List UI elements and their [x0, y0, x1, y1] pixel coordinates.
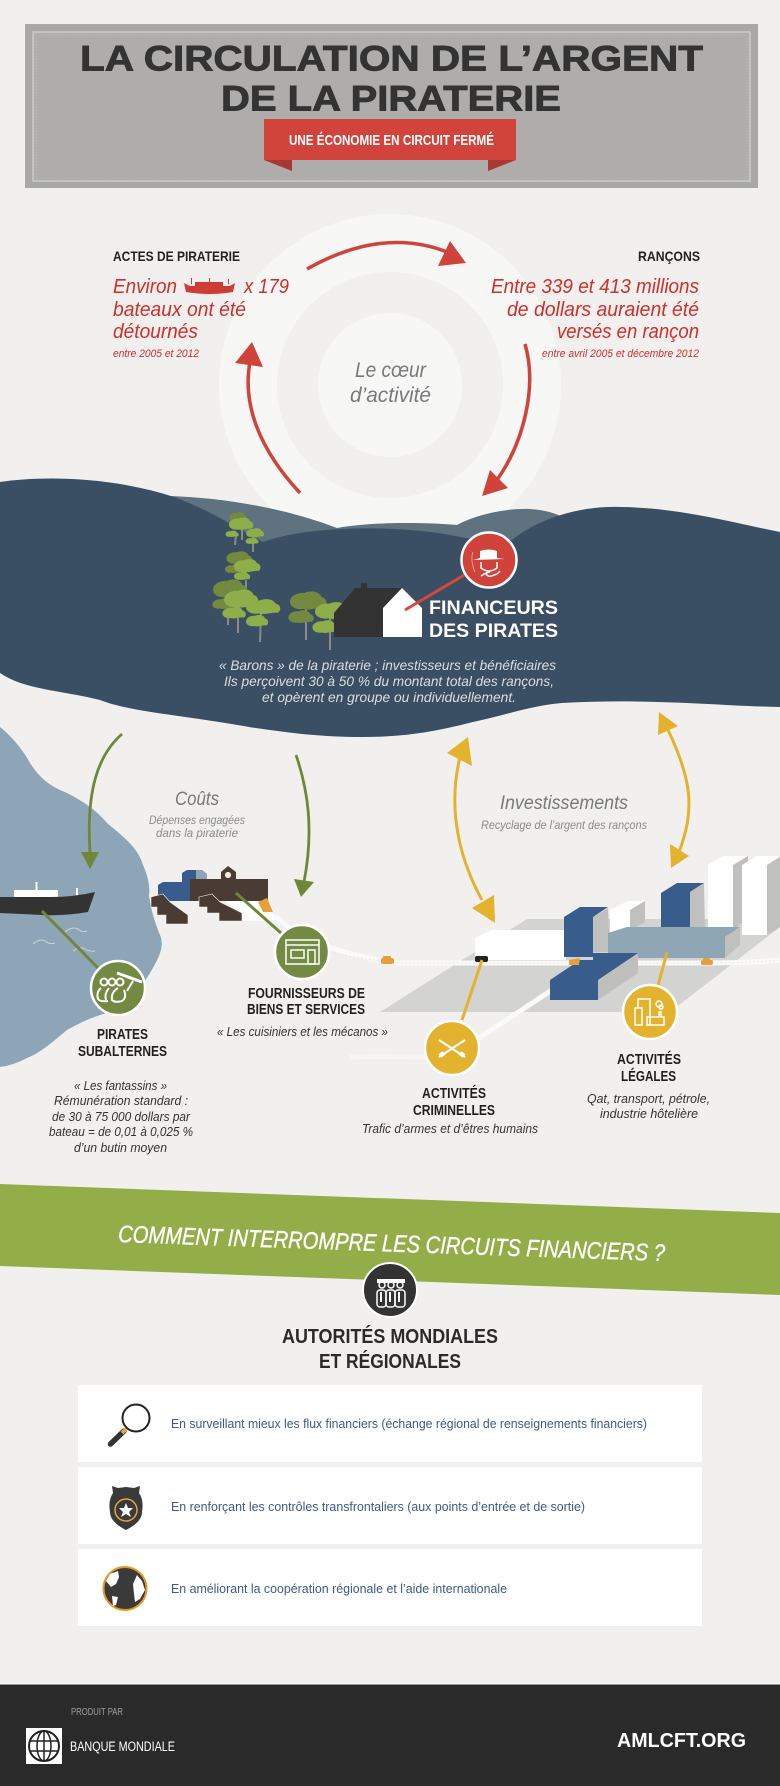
- header panel: [25, 24, 758, 188]
- ribbon subtitle: [264, 119, 516, 171]
- heading: fournisseurs: « Les cuisiniers et les mécanos »: [217, 1025, 388, 1039]
- village: [151, 866, 273, 924]
- icon: financier: [405, 532, 516, 610]
- text: actes de piraterie: entre 2005 et 2012: [113, 348, 199, 360]
- text: rançons: versés en rançon: [557, 321, 699, 343]
- icon: fournisseurs: [236, 893, 329, 979]
- house: [334, 583, 422, 637]
- text: fantassins: de 30 à 75 000 dollars par: [52, 1110, 191, 1124]
- card: surveillance: [78, 1385, 702, 1462]
- heading: activités légales: Qat, transport, pétrole,: [587, 1092, 710, 1106]
- text: actes de piraterie: bateaux ont été: [113, 299, 246, 321]
- text: rançons: entre avril 2005 et décembre 2012: [542, 348, 699, 360]
- heading: pirates subalternes: [78, 1027, 167, 1060]
- icon: magnifier: [110, 1404, 150, 1444]
- heading: activités criminelles: Trafic d’armes et d’êtres humains: [362, 1122, 538, 1136]
- icon: ship: [184, 278, 235, 294]
- icon: pirates subalternes: [42, 911, 145, 1015]
- heading: financeurs: [429, 598, 558, 642]
- green banner: COMMENT INTERROMPRE LES CIRCUITS FINANCIERS ?: [118, 1221, 666, 1267]
- heading: activités criminelles: CRIMINELLES: [413, 1103, 495, 1119]
- text: investissements: Investissements: [500, 793, 628, 814]
- card: contrôles: En renforçant les contrôles transfrontaliers (aux points d’entrée et de sortie): [171, 1499, 585, 1514]
- roads: [226, 901, 780, 1057]
- footer: AMLCFT.ORG: [617, 1730, 746, 1752]
- cars: [381, 956, 713, 965]
- text: rançons: Entre 339 et 413 millions: [491, 276, 699, 298]
- text: coûts: Coûts: [175, 789, 219, 810]
- icon: activités criminelles: [425, 960, 482, 1075]
- heading: pirates subalternes: PIRATES: [97, 1027, 148, 1043]
- icon: activités légales: [623, 952, 677, 1039]
- heading: autorités: ET RÉGIONALES: [319, 1350, 461, 1373]
- footer: PRODUIT PAR: [71, 1707, 123, 1718]
- heading: fournisseurs: FOURNISSEURS DE: [248, 986, 365, 1002]
- icon: badge: [109, 1486, 143, 1530]
- trees: [212, 512, 351, 650]
- text: fantassins: bateau = de 0,01 à 0,025 %: [49, 1125, 193, 1139]
- heading: activités criminelles: [362, 1085, 538, 1136]
- arrow: yellow legal: [658, 712, 689, 868]
- ribbon subtitle: UNE ÉCONOMIE EN CIRCUIT FERMÉ: [289, 132, 494, 149]
- heading: financeurs: DES PIRATES: [429, 621, 558, 642]
- text: actes de piraterie: x 179: [243, 276, 289, 298]
- icon: authorities: [363, 1263, 417, 1317]
- logo: banque mondiale: [26, 1728, 175, 1764]
- ship: [0, 882, 95, 951]
- heading: activités légales: LÉGALES: [621, 1068, 676, 1085]
- heading: activités légales: ACTIVITÉS: [617, 1051, 681, 1068]
- text: coûts: dans la piraterie: [156, 826, 238, 840]
- heading: pirates subalternes: SUBALTERNES: [78, 1044, 167, 1060]
- arrow: top red: [307, 241, 466, 269]
- text: fantassins: d’un butin moyen: [74, 1141, 167, 1155]
- arrow: green right: [294, 755, 314, 897]
- title: [80, 40, 703, 118]
- gray city plane: [380, 919, 780, 1012]
- dark wave panel: [0, 479, 780, 737]
- heading: fournisseurs: [217, 986, 388, 1039]
- text: investissements: Recyclage de l’argent des rançons: [481, 818, 647, 832]
- heading: financeurs: FINANCEURS: [429, 598, 558, 619]
- card: coopération: En améliorant la coopération régionale et l’aide internationale: [171, 1581, 507, 1596]
- arrow: yellow criminal: [447, 737, 495, 923]
- heading: autorités: AUTORITÉS MONDIALES: [282, 1325, 498, 1348]
- text: rançons: de dollars auraient été: [507, 299, 699, 321]
- heading: activités légales: [587, 1051, 710, 1121]
- heading: fournisseurs: BIENS ET SERVICES: [247, 1002, 365, 1018]
- text: rançons: [491, 248, 700, 360]
- concentric circles: [219, 214, 561, 556]
- text: investissements: [481, 793, 647, 832]
- logo: banque mondiale: BANQUE MONDIALE: [70, 1739, 175, 1754]
- city buildings: [475, 856, 780, 1000]
- footer: [0, 1683, 780, 1786]
- card: surveillance: En surveillant mieux les flux financiers (échange régional de renseignements financiers): [171, 1416, 647, 1431]
- heading: activités criminelles: ACTIVITÉS: [422, 1085, 486, 1102]
- text: rançons: RANÇONS: [638, 248, 700, 264]
- card: contrôles: [78, 1467, 702, 1544]
- icon: globe: [104, 1567, 146, 1610]
- heading: autorités: [282, 1325, 498, 1373]
- text: actes de piraterie: [113, 248, 289, 360]
- text: le coeur d'activité: [350, 359, 431, 407]
- heading: activités légales: industrie hôtelière: [600, 1107, 698, 1121]
- title: LA CIRCULATION DE L’ARGENT: [80, 40, 703, 78]
- green banner: [0, 1184, 780, 1295]
- text: fantassins: Rémunération standard :: [54, 1094, 188, 1108]
- text: fantassins: « Les fantassins »: [74, 1079, 167, 1093]
- text: actes de piraterie: détournés: [113, 321, 198, 343]
- arrow: right red: [482, 344, 530, 496]
- text: coûts: Dépenses engagées: [149, 813, 245, 827]
- text: barons description: et opèrent en groupe ou individuellement.: [262, 689, 516, 705]
- card: coopération: [78, 1549, 702, 1626]
- text: actes de piraterie: ACTES DE PIRATERIE: [113, 248, 240, 264]
- text: barons description: « Barons » de la piraterie ; investisseurs et bénéficiaires: [219, 657, 556, 673]
- text: le coeur d'activité: d’activité: [350, 384, 431, 407]
- arrow: green left: [81, 734, 122, 869]
- light hills: [170, 496, 565, 560]
- text: fantassins: [49, 1079, 193, 1155]
- title: DE LA PIRATERIE: [221, 80, 561, 118]
- sea: [0, 727, 162, 1067]
- text: le coeur d'activité: Le cœur: [355, 359, 427, 382]
- text: actes de piraterie: Environ: [113, 276, 177, 298]
- arrow: left red: [235, 342, 300, 493]
- text: coûts: [149, 789, 245, 840]
- text: barons description: Ils perçoivent 30 à 50 % du montant total des rançons,: [224, 673, 554, 689]
- text: barons description: [219, 657, 556, 705]
